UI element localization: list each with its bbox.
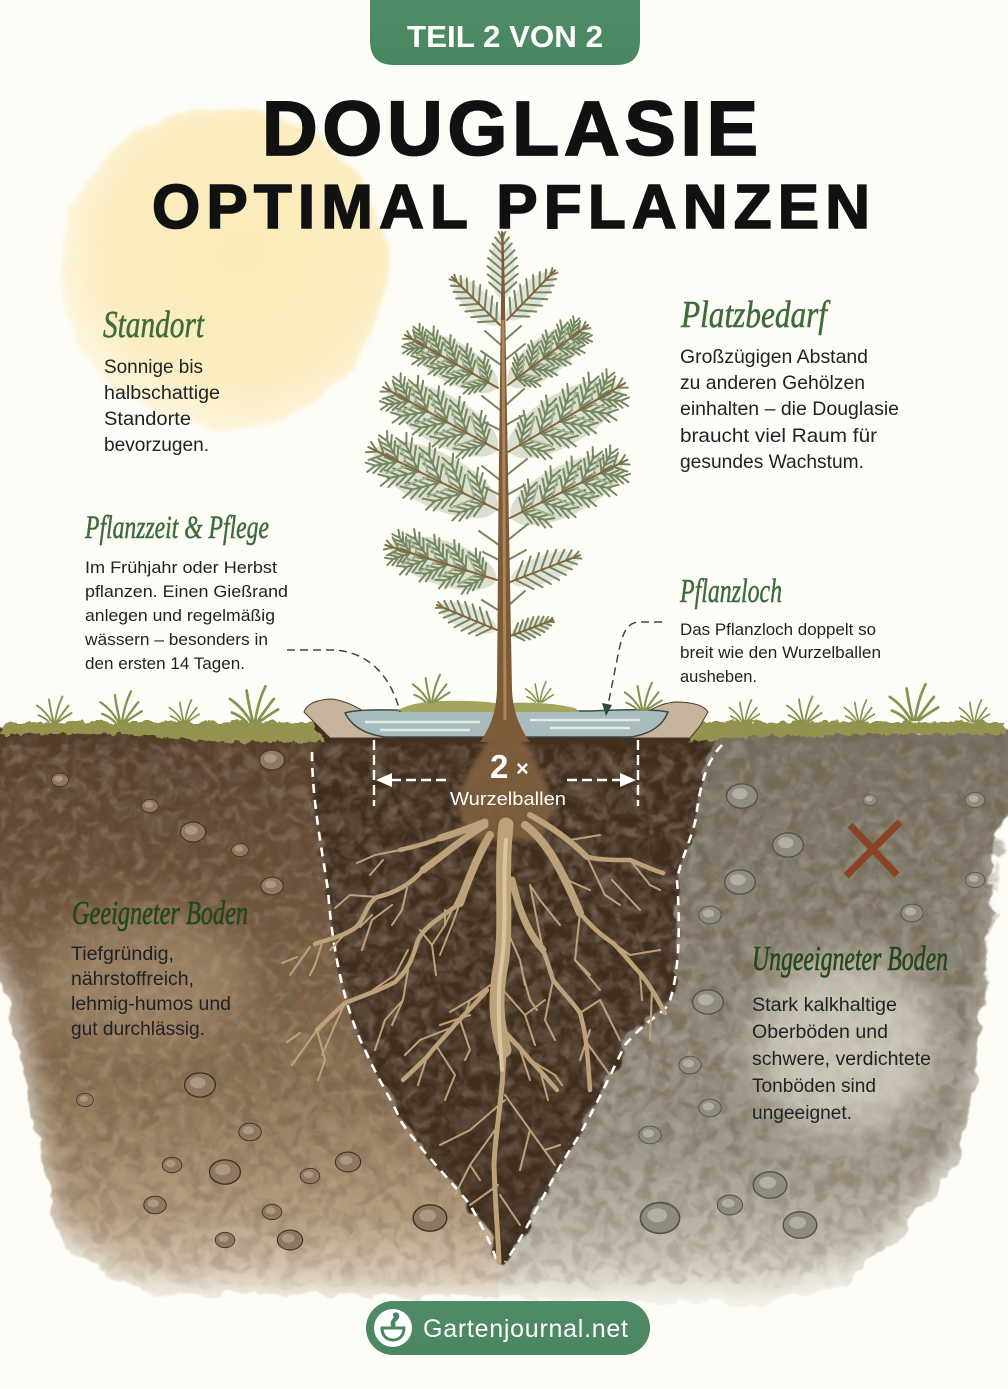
roots medium [315, 838, 665, 1090]
unsuitable cross mark [846, 822, 900, 876]
body: lehmig-humos und [71, 994, 231, 1015]
body: anlegen und regelmäßig [85, 606, 275, 625]
body: gut durchlässig. [71, 1019, 205, 1040]
body: Im Frühjahr oder Herbst [85, 558, 277, 577]
branches [354, 232, 641, 645]
body: pflanzen. Einen Gießrand [85, 582, 288, 601]
root system [282, 735, 665, 1262]
body [680, 346, 899, 473]
left arrow [376, 773, 446, 787]
root ball width marker [374, 740, 638, 809]
trunk highlight [503, 320, 505, 720]
title [152, 86, 870, 242]
body [752, 994, 931, 1124]
body: Tonböden sind [752, 1075, 876, 1097]
sun watercolor wash [60, 108, 388, 428]
lighter patch behind right text [750, 955, 940, 1135]
root highlight [499, 840, 506, 1070]
soil body [0, 722, 1008, 1304]
heading: Pflanzloch [679, 573, 782, 610]
body: Standorte [104, 409, 191, 430]
dashed boundary right [505, 745, 722, 1262]
label: Wurzelballen [450, 789, 566, 809]
title: OPTIMAL PFLANZEN [152, 173, 870, 242]
moss strip right [690, 722, 1005, 742]
lighter patch behind left text [40, 910, 250, 1046]
grass tufts [37, 684, 989, 722]
heading: Standort [103, 304, 205, 346]
tree [354, 232, 641, 742]
stones right [639, 784, 985, 1238]
text: Standort [103, 304, 220, 456]
body: Oberböden und [752, 1021, 888, 1043]
banner: part 2 of 2 [370, 0, 640, 65]
earth berm [304, 699, 708, 738]
body: wässern – besonders in [84, 630, 268, 649]
body: Großzügigen Abstand [680, 346, 868, 368]
body: den ersten 14 Tagen. [85, 654, 245, 673]
soil mottling [0, 735, 1008, 1285]
water highlights [365, 720, 640, 730]
body: Tiefgründig, [71, 944, 174, 965]
pale fade at soil edges [0, 850, 1008, 1340]
banner: part 2 of 2: TEIL 2 VON 2 [407, 19, 603, 54]
body: braucht viel Raum für [680, 425, 878, 447]
body: Sonnige bis [104, 357, 203, 378]
suitable soil left [0, 728, 505, 1298]
root crown [459, 735, 552, 840]
site name: Gartenjournal.net [423, 1315, 628, 1343]
callout line to watering rim [287, 650, 400, 712]
title: DOUGLASIE [262, 86, 758, 172]
water [345, 710, 668, 737]
body: zu anderen Gehölzen [680, 372, 865, 394]
mound grass [413, 675, 662, 710]
body [680, 620, 881, 686]
text: Pflanzloch [679, 573, 881, 686]
watering rim and water basin [304, 675, 708, 738]
body: halbschattige [104, 383, 220, 404]
arrow to planting hole [602, 622, 662, 716]
roots thin [282, 835, 660, 1225]
heading: Platzbedarf [680, 294, 831, 336]
dashed boundary left [312, 752, 497, 1262]
body [84, 558, 288, 673]
logo [374, 1309, 412, 1347]
body: gesundes Wachstum. [680, 451, 864, 473]
body: bevorzugen. [104, 435, 209, 456]
body: ausheben. [680, 667, 757, 686]
label [450, 748, 566, 809]
text: Ungeeigneter Boden [752, 939, 948, 1124]
body [71, 944, 231, 1040]
label: × [516, 756, 529, 781]
body [104, 357, 220, 456]
stones left [52, 750, 447, 1250]
soil cross-section [0, 722, 1008, 1340]
pit backing under basin [322, 722, 702, 744]
footer badge [366, 1301, 650, 1355]
body: Stark kalkhaltige [752, 994, 897, 1016]
dashed verticals [374, 740, 638, 806]
text: Platzbedarf [680, 294, 899, 473]
green mound [395, 701, 580, 712]
body: schwere, verdichtete [752, 1048, 931, 1070]
text: Geeigneter Boden [71, 895, 248, 1040]
body: nährstoffreich, [71, 969, 194, 990]
body: einhalten – die Douglasie [680, 398, 899, 420]
heading: Geeigneter Boden [72, 895, 248, 932]
body: ungeeignet. [752, 1102, 852, 1124]
moss strip left [0, 722, 325, 742]
text: Pflanzzeit und Pflege [84, 510, 288, 673]
roots thick [423, 815, 587, 1262]
body: breit wie den Wurzelballen [680, 643, 881, 662]
right arrow [567, 773, 636, 787]
trunk [480, 232, 530, 742]
unsuitable soil right [500, 728, 1008, 1304]
trunk side needles [479, 326, 528, 610]
planting pit dark soil [312, 722, 724, 1262]
grass and moss surface [0, 684, 1005, 742]
label: 2 [490, 748, 508, 785]
body: Das Pflanzloch doppelt so [680, 620, 876, 639]
heading: Pflanzzeit & Pflege [84, 510, 269, 546]
